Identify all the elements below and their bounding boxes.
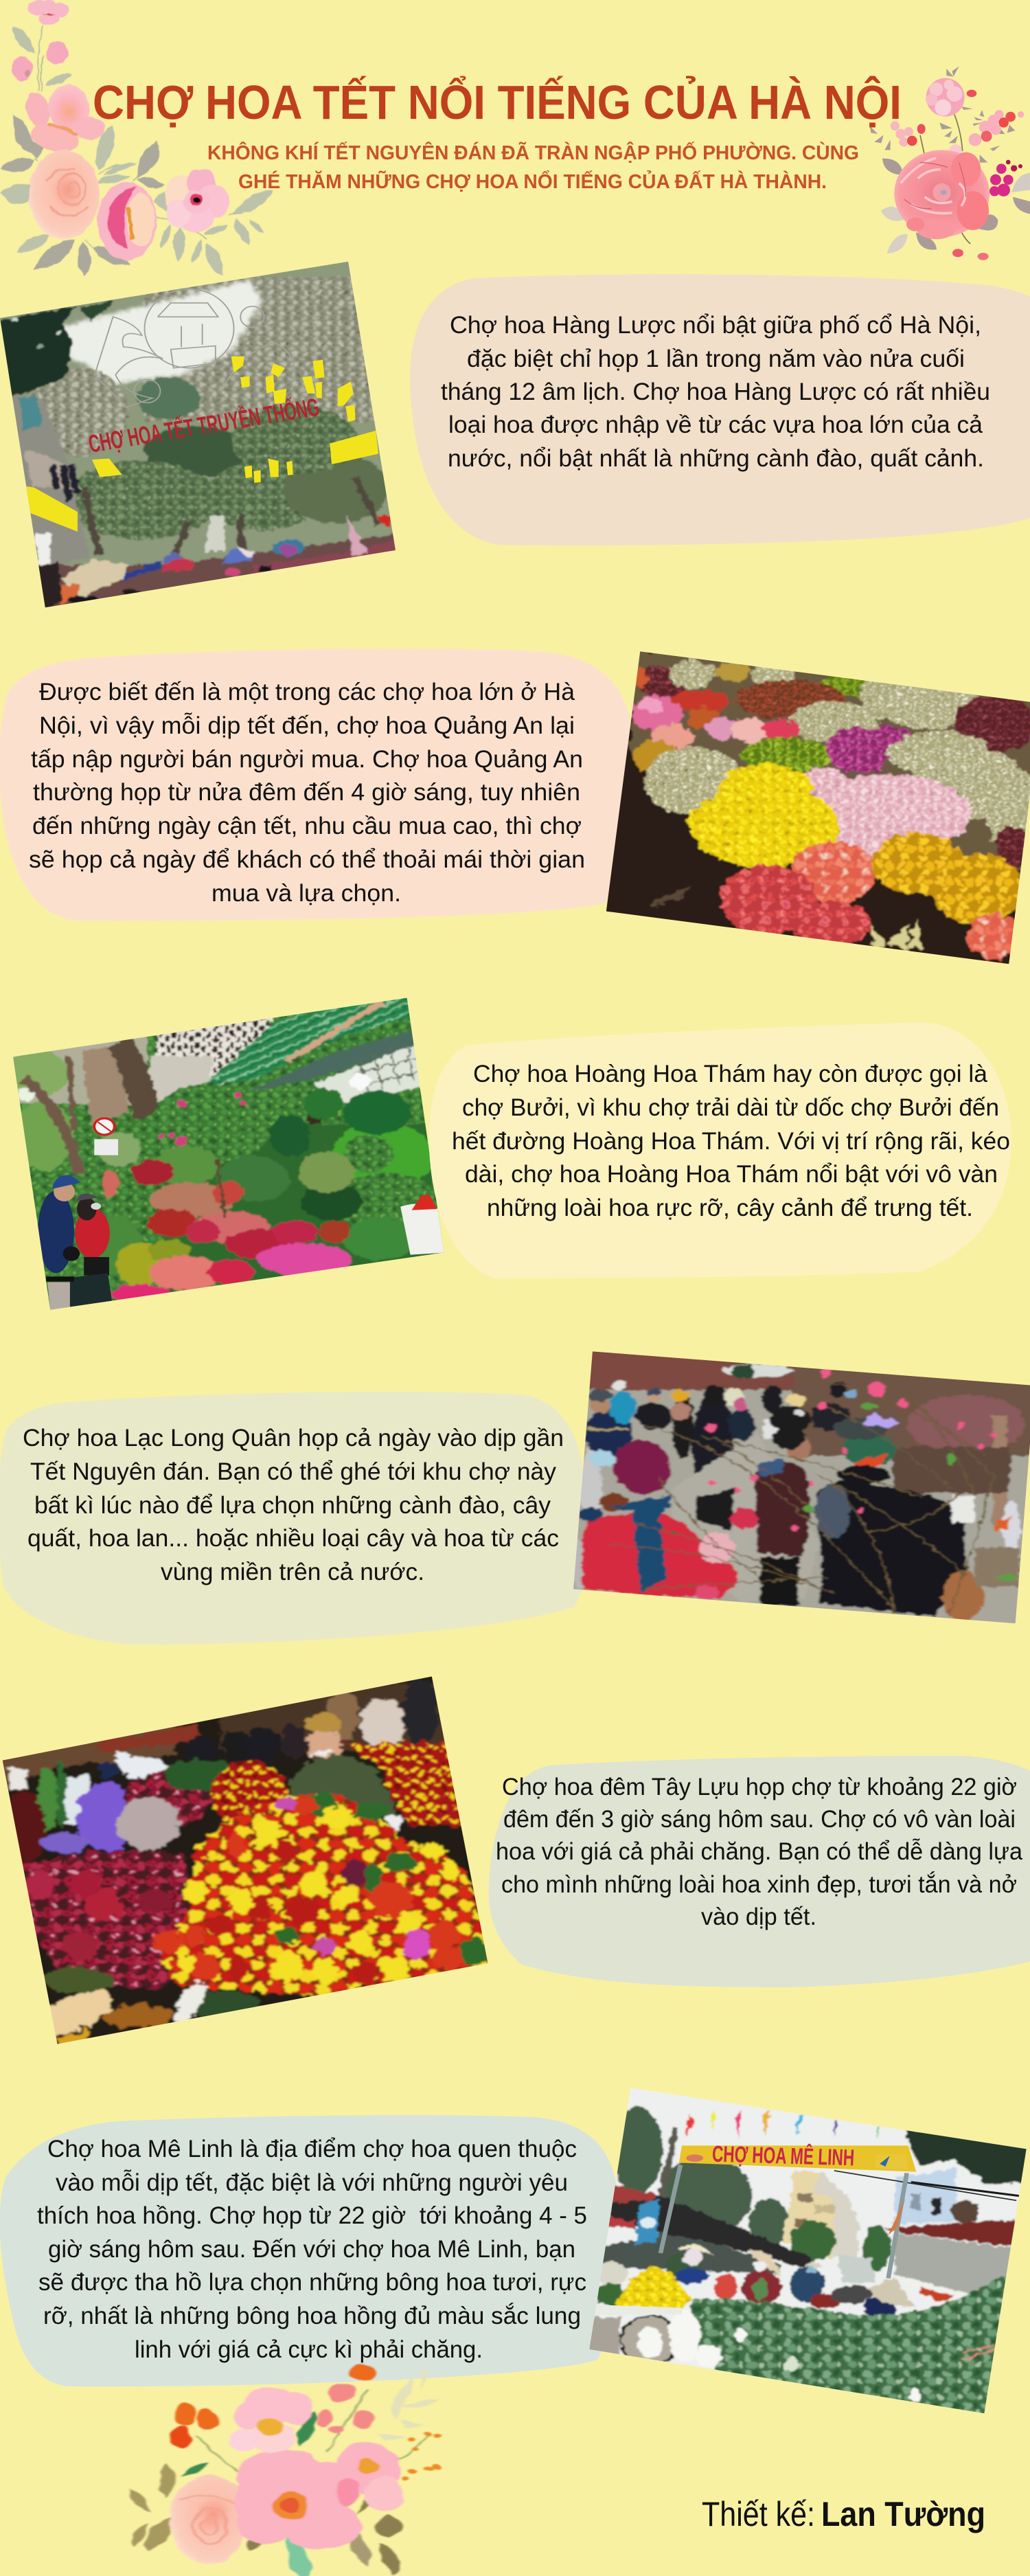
panel: Chợ hoa Quảng An xyxy=(0,648,634,920)
body text: quất, hoa lan... hoặc nhiều loại cây và hoa từ các xyxy=(27,1524,559,1552)
cart strip xyxy=(595,2305,682,2315)
body text: Chợ hoa Lạc Long Quân họp cả ngày vào dịp gần xyxy=(23,1424,564,1451)
white pot with red lid xyxy=(400,1195,447,1255)
body text: những loài hoa rực rỡ, cây cảnh để trưng tết. xyxy=(487,1194,973,1221)
sign: CHỢ HOA MÊ LINH xyxy=(711,2141,855,2171)
body text: Chợ hoa đêm Tây Lựu họp chợ từ khoảng 22 giờ xyxy=(502,1773,1017,1800)
no-entry sign xyxy=(94,1118,118,1155)
decoration: top-right peony bouquet xyxy=(870,67,1030,260)
decoration: bottom flower bouquet xyxy=(130,2365,441,2576)
text blob xyxy=(429,1022,1011,1278)
panel: Chợ hoa Mê Linh xyxy=(0,2115,619,2386)
icon: poppy xyxy=(165,169,229,232)
decoration: top-left watercolor flowers xyxy=(0,0,273,276)
panel: Chợ hoa Hàng Lược xyxy=(410,274,1030,545)
icon: left pink cluster xyxy=(891,122,917,146)
icon: small pink blossom xyxy=(27,0,70,25)
body text: vào mỗi dịp tết, đặc biệt là với những người yêu xyxy=(56,2169,568,2196)
photo: Hàng Lược street with sign xyxy=(0,262,396,607)
body text: tấp nập người bán người mua. Chợ hoa Quảng An xyxy=(31,745,583,773)
body text xyxy=(23,1424,564,1585)
body text: cho mình những loài hoa xinh đẹp, tươi tắn và nở xyxy=(501,1871,1017,1898)
body text: tháng 12 âm lịch. Chợ hoa Hàng Lược có rất nhiều xyxy=(441,378,990,405)
body text: hết đường Hoàng Hoa Thám. Với vị trí rộng rãi, kéo xyxy=(452,1127,1010,1155)
body text: linh với giá cả cực kì phải chăng. xyxy=(135,2336,483,2363)
panel: Chợ hoa Lạc Long Quân xyxy=(0,1392,586,1645)
body text xyxy=(37,2135,587,2363)
credit: Lan Tường xyxy=(821,2495,985,2533)
photo: Tây Lựu dahlias with vendor xyxy=(3,1676,488,2044)
credit xyxy=(702,2495,985,2533)
icon: rose xyxy=(170,2474,249,2565)
subtitle: KHÔNG KHÍ TẾT NGUYÊN ĐÁN ĐÃ TRÀN NGẬP PHỐ PHƯỜNG. CÙNG xyxy=(207,141,859,164)
body text: Chợ hoa Mê Linh là địa điểm chợ hoa quen thuộc xyxy=(47,2135,577,2162)
body text xyxy=(452,1060,1010,1221)
body text: sẽ được tha hồ lựa chọn những bông hoa tươi, rực xyxy=(38,2268,586,2296)
body text: Nội, vì vậy mỗi dịp tết đến, chợ hoa Quảng An lại xyxy=(39,712,575,739)
panel: Chợ hoa đêm Tây Lựu xyxy=(488,1756,1030,1987)
text blob xyxy=(0,1392,586,1645)
body text: rỡ, nhất là những bông hoa hồng đủ màu sắc lung xyxy=(43,2302,581,2329)
gate wires and poles xyxy=(661,2165,1019,2279)
sign text: CHỢ HOA TẾT TRUYỀN THỐNG xyxy=(86,392,322,458)
body text: giờ sáng hôm sau. Đến với chợ hoa Mê Linh, bạn xyxy=(48,2235,575,2263)
text blob xyxy=(488,1756,1030,1987)
body text xyxy=(441,311,990,472)
photo: Mê Linh market gate xyxy=(589,2088,1027,2414)
body text: vùng miền trên cả nước. xyxy=(161,1558,424,1585)
people and scooter xyxy=(38,1175,113,1310)
subtitle: GHÉ THĂM NHỮNG CHỢ HOA NỔI TIẾNG CỦA ĐẤT HÀ THÀNH. xyxy=(238,170,827,193)
credit: Thiết kế: xyxy=(702,2495,815,2533)
icon: pink buds xyxy=(12,41,68,81)
body text: hoa với giá cả phải chăng. Bạn có thể dễ dàng lựa xyxy=(496,1838,1022,1865)
icon: large pink flower xyxy=(233,2449,361,2549)
text blob xyxy=(0,2115,619,2386)
body text xyxy=(496,1773,1022,1930)
icon: peach flower xyxy=(22,84,105,156)
icon: large coral peony xyxy=(894,150,989,239)
icon: upper right pink flower xyxy=(335,2442,404,2513)
icon: orange berries xyxy=(402,2433,441,2480)
photo: Hoàng Hoa Thám plants xyxy=(13,997,444,1309)
icon: orange blooms xyxy=(169,2365,378,2448)
icon: rose xyxy=(29,150,100,239)
icon: pale pink flower xyxy=(926,78,965,117)
body text: Tết Nguyên đán. Bạn có thể ghé tới khu chợ này xyxy=(30,1458,556,1485)
wire arch decoration xyxy=(95,289,295,407)
body text: chợ Bưởi, vì khu chợ trải dài từ dốc chợ Bưởi đến xyxy=(462,1094,999,1121)
body text: bất kì lúc nào để lựa chọn những cành đào, cây xyxy=(34,1491,551,1519)
body text: nước, nổi bật nhất là những cành đào, quất cảnh. xyxy=(448,444,984,472)
body text: sẽ họp cả ngày để khách có thể thoải mái thời gian xyxy=(29,846,585,873)
text blob xyxy=(410,274,1030,545)
photo: Quảng An flower bouquets xyxy=(606,651,1030,964)
body text: mua và lựa chọn. xyxy=(211,879,401,907)
body text: đặc biệt chỉ họp 1 lần trong năm vào nửa cuối xyxy=(467,345,965,372)
icon: upper pink flower xyxy=(230,2387,313,2452)
body text: Chợ hoa Hoàng Hoa Thám hay còn được gọi là xyxy=(473,1060,987,1087)
icon: right pink cluster xyxy=(949,110,1024,157)
yellow lanterns xyxy=(26,357,378,532)
icon: pink sprigs xyxy=(317,2384,375,2432)
subtitle xyxy=(207,141,859,193)
icon: magenta cluster xyxy=(989,160,1022,196)
body text: Chợ hoa Hàng Lược nổi bật giữa phố cổ Hà Nội, xyxy=(450,311,981,339)
photo: Lạc Long Quân peach blossom crowd xyxy=(573,1351,1030,1624)
text blob xyxy=(0,648,634,920)
body text: thích hoa hồng. Chợ họp từ 22 giờ tới khoảng 4 - 5 xyxy=(37,2202,587,2229)
body text: đêm đến 3 giờ sáng hôm sau. Chợ có vô vàn loài xyxy=(503,1805,1016,1833)
body text: loại hoa được nhập về từ các vựa hoa lớn của cả xyxy=(448,411,983,438)
title: CHỢ HOA TẾT NỔI TIẾNG CỦA HÀ NỘI xyxy=(93,75,902,129)
panel: Chợ hoa Hoàng Hoa Thám xyxy=(429,1022,1011,1278)
body text: Được biết đến là một trong các chợ hoa lớn ở Hà xyxy=(39,678,575,705)
sign xyxy=(679,2141,916,2172)
body text: thường họp từ nửa đêm đến 4 giờ sáng, tuy nhiên xyxy=(33,778,580,806)
icon: magenta peony xyxy=(98,182,157,260)
body text: vào dịp tết. xyxy=(701,1903,816,1930)
body text xyxy=(29,678,585,907)
body text: dài, chợ hoa Hoàng Hoa Thám nổi bật với vô vàn xyxy=(465,1160,998,1188)
icon: red buds xyxy=(917,90,989,260)
body text: đến những ngày cận tết, nhu cầu mua cao, thì chợ xyxy=(32,812,582,839)
